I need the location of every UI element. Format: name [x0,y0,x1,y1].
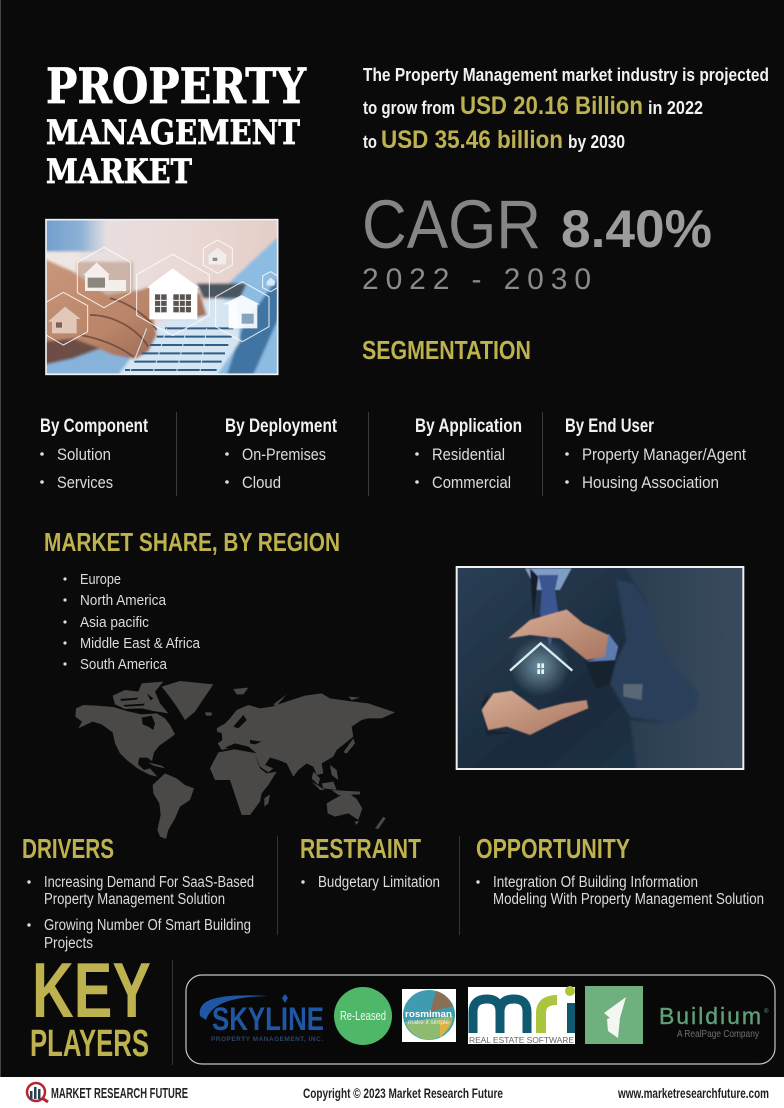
market size summary: in 2022 [648,98,703,118]
list: regions: Europe [80,571,121,588]
column: by deployment: On-Premises [242,445,326,464]
column: by component [40,416,149,492]
panel: opportunity: Integration Of Building Information [493,874,698,891]
logo: Rosmiman: make it simple [408,1019,449,1026]
heading: key players: KEY [32,946,151,1034]
list: regions: Middle East & Africa [80,635,201,652]
list: regions [63,571,201,673]
logo: MRI: REAL ESTATE SOFTWARE [469,1035,574,1045]
title: MANAGEMENT [46,113,300,153]
column: by application: Commercial [432,473,511,492]
logo: Buildium [659,1003,769,1040]
logo: Rosmiman: rosmiman [405,1009,452,1019]
logo: Skyline [200,994,324,1043]
title [46,57,307,192]
column: by component: Solution [57,445,111,464]
icon: market research future logo [27,1083,48,1102]
column: by end user: Property Manager/Agent [582,445,746,464]
logo: Buildium: Buildium [659,1003,761,1029]
panel: key player logos [186,975,775,1064]
brand name: MARKET RESEARCH FUTURE [51,1085,188,1102]
photo: hands on laptop with house icons [43,218,280,377]
heading: segmentation: SEGMENTATION [362,335,531,365]
column: by deployment: By Deployment [225,416,338,437]
CAGR callout: CAGR [362,186,541,263]
panel: drivers: Projects [44,935,93,952]
column: by component: By Component [40,416,149,437]
column: by application: By Application [415,416,522,437]
panel: segmentation columns [40,412,746,496]
heading: restraint: RESTRAINT [300,833,421,864]
logo: green square [585,986,643,1044]
market size summary: USD 35.46 billion [381,126,563,154]
heading: drivers: DRIVERS [22,833,114,864]
column: by component: Services [57,473,113,492]
world map [75,681,395,839]
heading: market share by region: MARKET SHARE, BY REGION [44,527,340,557]
footer [0,1077,784,1108]
logo: Rosmiman [402,989,456,1042]
column: by end user: Housing Association [582,473,719,492]
heading: key players: PLAYERS [30,1023,149,1065]
market size summary: to grow from [363,98,455,118]
CAGR callout: 2022 - 2030 [362,263,591,296]
column: by end user: By End User [565,416,654,437]
panel: drivers: Property Management Solution [44,891,225,908]
title: PROPERTY [46,57,307,115]
column: by end user [565,416,746,492]
panel: drivers: Increasing Demand For SaaS-Based [44,874,254,891]
logo: Skyline: PROPERTY MANAGEMENT, INC. [211,1036,323,1043]
title: MARKET [46,152,192,192]
column: by application: Residential [432,445,505,464]
photo: businessman protecting a house [453,565,743,772]
market size summary: by 2030 [568,132,625,152]
panel: drivers [22,833,254,952]
market size summary: USD 20.16 Billion [460,92,643,120]
column: by application [415,416,522,492]
logo: Skyline: SKYLINE [212,1001,324,1037]
list: regions: Asia pacific [80,614,149,631]
column: by deployment [225,416,338,492]
CAGR callout [362,186,712,296]
panel: restraint: Budgetary Limitation [318,874,440,891]
panel: drivers: Growing Number Of Smart Building [44,917,251,934]
market size summary: to [363,132,377,152]
heading: opportunity: OPPORTUNITY [476,833,630,864]
icon: main house [147,268,199,319]
logo: Buildium: A RealPage Company [677,1028,760,1040]
CAGR callout: 8.40% [561,200,712,259]
column: by deployment: Cloud [242,473,281,492]
list: regions: South America [80,656,168,673]
logo: Buildium: ® [764,1008,769,1015]
panel: opportunity [476,833,764,908]
market size summary [363,65,769,154]
logo: Re-Leased [334,987,392,1045]
list: regions: North America [80,592,167,609]
heading: key players [30,946,151,1065]
copyright: Copyright © 2023 Market Research Future [303,1085,503,1101]
logo: Re-Leased: Re-Leased [340,1008,386,1023]
panel: restraint [300,833,440,891]
logo: MRI [468,986,575,1045]
